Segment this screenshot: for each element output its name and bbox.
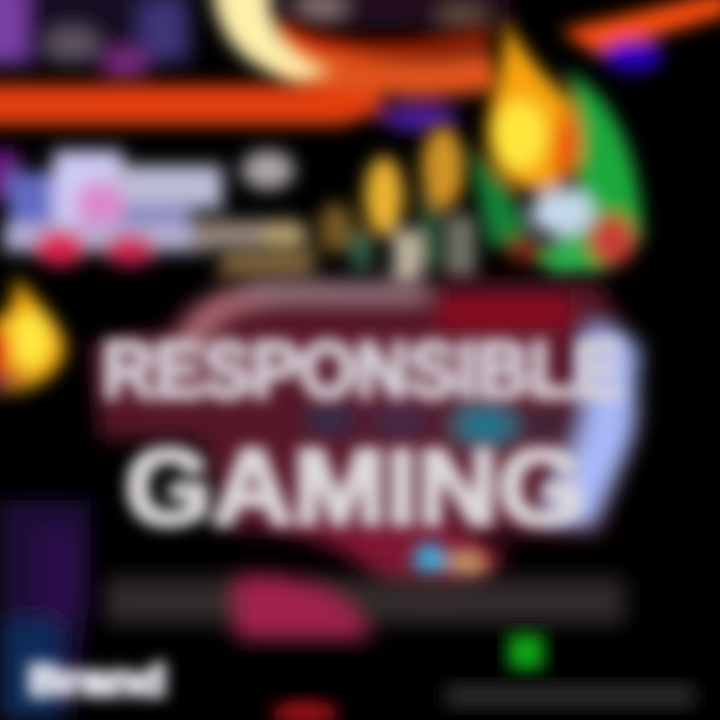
icon: colourful emblem with flame: [468, 15, 642, 276]
text: footer caption: [445, 684, 695, 708]
title: GAMING: [125, 426, 585, 547]
panel: brand logo: [0, 150, 309, 266]
panel: subtitle bar: [105, 574, 625, 640]
title: [102, 325, 622, 547]
panel: left bottom strip: [0, 500, 90, 720]
icon: crescent: [212, 0, 335, 82]
panel: title arch backdrop: [90, 280, 640, 604]
icon: left flame: [0, 275, 66, 400]
icon: green marker: [508, 634, 544, 670]
text: brand name: Brand: [28, 656, 166, 705]
icon: small diamond emblem: [413, 543, 488, 581]
icon: small flames and candles: [215, 126, 476, 285]
title: RESPONSIBLE: [102, 325, 622, 414]
panel: top banner: [0, 0, 720, 132]
icon: red marker: [271, 700, 339, 720]
